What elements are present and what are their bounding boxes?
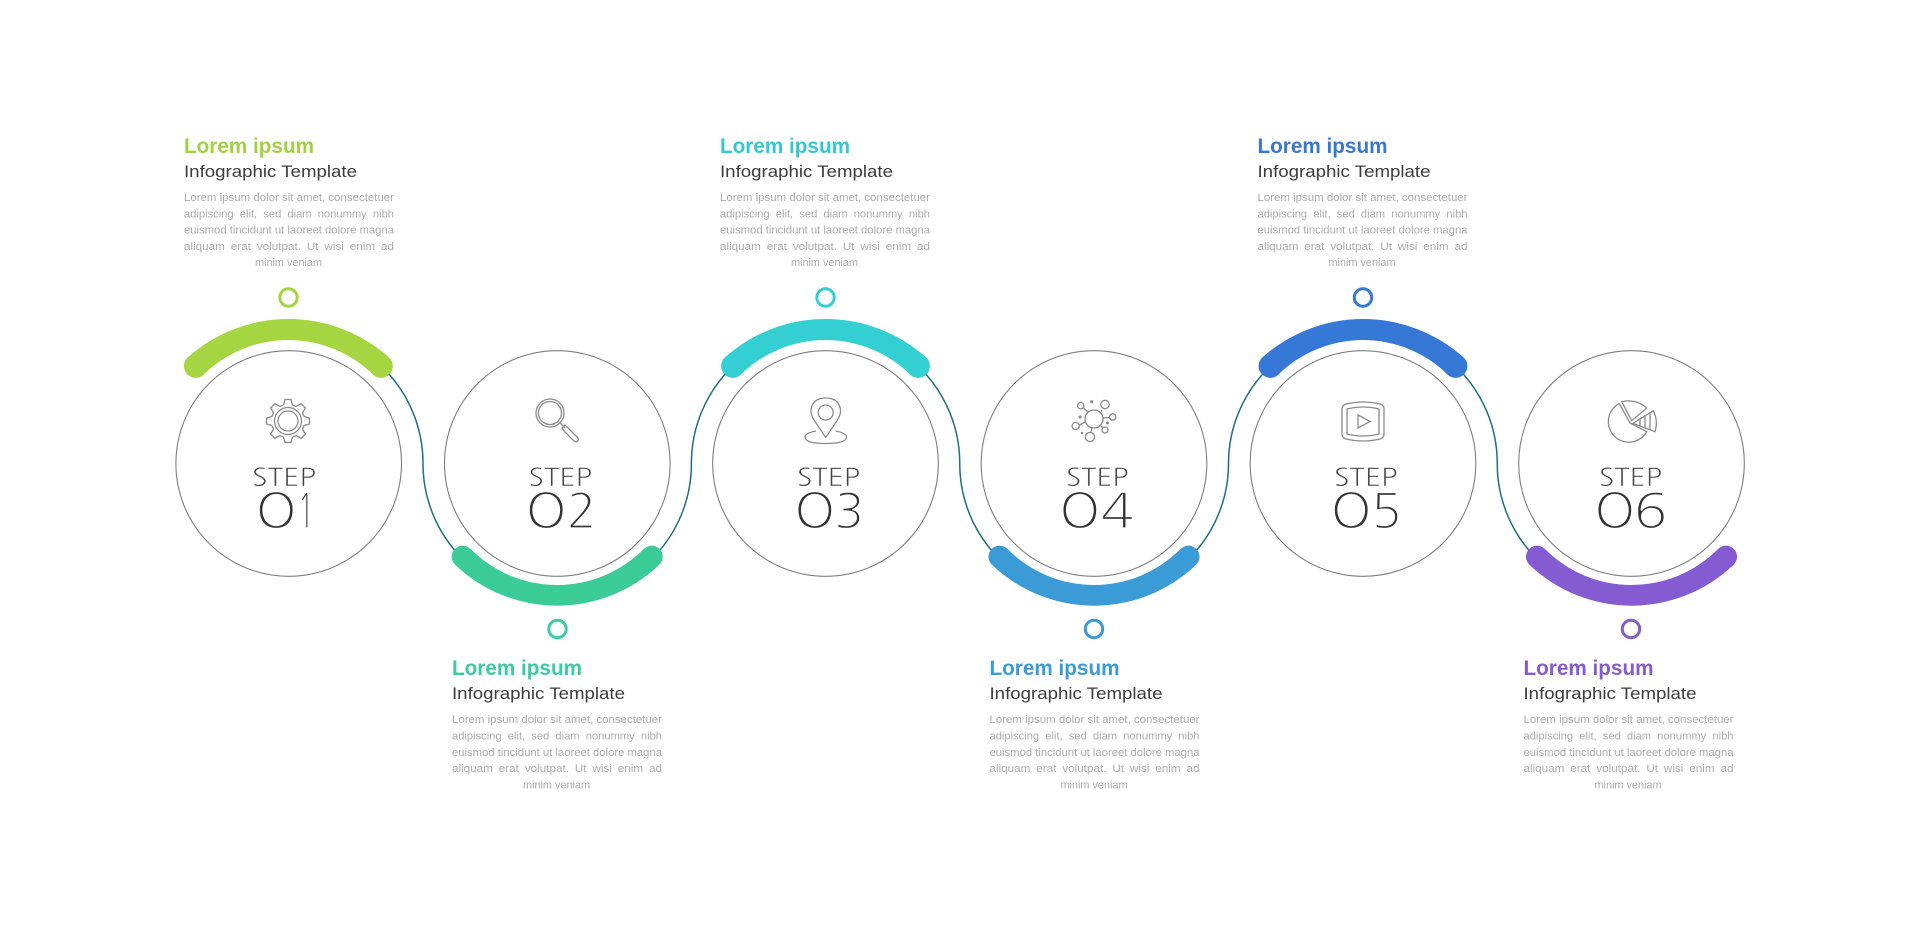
heading: step 5 title: Lorem ipsum — [1258, 134, 1388, 158]
label: step 3: STEP — [797, 465, 860, 490]
text block: step 6 description: adipiscing elit, sed diam nonummy nibh — [1524, 730, 1734, 742]
number: step 1: 1 — [298, 487, 314, 535]
connector: step 4 to 5 — [1189, 368, 1268, 558]
connector: step 2 to 3 — [652, 368, 730, 558]
subheading: step 3: Infographic Template — [720, 162, 893, 181]
text block: step 1 description: minim veniam — [255, 257, 322, 269]
text block: step 1 description: Lorem ipsum dolor sit amet, consectetuer — [184, 192, 394, 204]
text block: step 1 description: euismod tincidunt ut laoreet dolore magna — [184, 224, 395, 236]
icon: pie chart — [1608, 401, 1656, 442]
number: step 4: 4 — [1100, 487, 1134, 535]
label: step 5: STEP — [1334, 465, 1398, 490]
number: step 6: 6 — [1634, 487, 1668, 535]
panel: step 6 — [1519, 351, 1744, 792]
text block: step 6 description — [1524, 714, 1734, 792]
text block: step 3 description — [720, 192, 931, 269]
text block: step 4 description — [990, 714, 1200, 792]
text block: step 5 description: aliquam erat volutpat. Ut wisi enim ad — [1258, 241, 1468, 253]
ring marker: step 4 — [1085, 620, 1103, 638]
ring marker: step 5 — [1354, 289, 1372, 306]
arc: step 3 — [721, 319, 930, 378]
arc: step 4 — [988, 546, 1200, 606]
text block: step 5 description: euismod tincidunt ut laoreet dolore magna — [1258, 224, 1468, 236]
text block: step 3 description: adipiscing elit, sed diam nonummy nibh — [720, 208, 930, 220]
heading: step 2 title: Lorem ipsum — [452, 656, 582, 680]
number: step 3: 3 — [835, 487, 864, 535]
text block: step 3 description: Lorem ipsum dolor sit amet, consectetuer — [720, 192, 930, 204]
number: step 4 — [1059, 487, 1134, 535]
circle: step 3 — [713, 351, 938, 576]
circle: step 6 — [1519, 351, 1744, 576]
text block: step 2 description: aliquam erat volutpat. Ut wisi enim ad — [452, 763, 662, 775]
text block: step 1 description: adipiscing elit, sed diam nonummy nibh — [184, 208, 394, 220]
ring marker: step 6 — [1622, 620, 1640, 638]
heading: step 3 title: Lorem ipsum — [720, 134, 850, 158]
text block: step 1 description — [184, 192, 395, 269]
arc: step 5 — [1259, 319, 1467, 378]
subheading: step 4: Infographic Template — [990, 684, 1162, 703]
text block: step 6 description: aliquam erat volutpat. Ut wisi enim ad — [1524, 763, 1734, 775]
panel: step 5 — [1250, 134, 1476, 576]
panel: step 3 — [713, 134, 938, 576]
text block: step 4 description: adipiscing elit, sed diam nonummy nibh — [990, 730, 1200, 742]
label: step 2: STEP — [528, 465, 592, 490]
text block: step 4 description: minim veniam — [1060, 780, 1128, 792]
subheading: step 5: Infographic Template — [1258, 162, 1430, 181]
arc: step 2 — [452, 546, 663, 606]
text block: step 6 description: Lorem ipsum dolor sit amet, consectetuer — [1524, 714, 1734, 726]
number: step 5: 5 — [1371, 487, 1402, 535]
number: step 6 — [1594, 487, 1668, 535]
connector: step 5 to 6 — [1458, 368, 1536, 558]
text block: step 5 description: Lorem ipsum dolor sit amet, consectetuer — [1258, 192, 1468, 204]
label: step 6: STEP — [1599, 465, 1662, 490]
arc: step 1 — [184, 319, 393, 378]
text block: step 2 description: minim veniam — [523, 780, 590, 792]
text block: step 5 description: minim veniam — [1328, 257, 1396, 269]
heading: step 4 title: Lorem ipsum — [990, 656, 1120, 680]
subheading: step 2: Infographic Template — [452, 684, 625, 703]
icon: magnifier — [536, 399, 578, 442]
icon: network — [1072, 400, 1116, 442]
arc: step 6 — [1526, 546, 1737, 606]
label: step 1: STEP — [252, 465, 316, 490]
label: step 4: STEP — [1066, 465, 1128, 490]
number: step 4: O — [1059, 487, 1100, 535]
text block: step 2 description: Lorem ipsum dolor sit amet, consectetuer — [452, 714, 662, 726]
text block: step 1 description: aliquam erat volutpat. Ut wisi enim ad — [184, 241, 394, 253]
text block: step 2 description — [452, 714, 663, 792]
circle: step 1 — [176, 351, 402, 576]
ring marker: step 1 — [280, 289, 297, 306]
panel: step 1 — [176, 134, 402, 576]
text block: step 3 description: aliquam erat volutpat. Ut wisi enim ad — [720, 241, 930, 253]
panel: step 2 — [444, 351, 670, 792]
connector: step 1 to 2 — [384, 368, 462, 558]
text block: step 3 description: euismod tincidunt ut laoreet dolore magna — [720, 224, 931, 236]
number: step 1: O — [256, 487, 297, 535]
number: step 5: O — [1331, 487, 1372, 535]
subheading: step 6: Infographic Template — [1524, 684, 1696, 703]
panel: step 4 — [981, 351, 1207, 792]
circle: step 5 — [1250, 351, 1476, 576]
number: step 2 — [526, 487, 596, 535]
heading: step 6 title: Lorem ipsum — [1524, 656, 1654, 680]
icon: location pin — [805, 398, 846, 444]
text block: step 4 description: aliquam erat volutpat. Ut wisi enim ad — [990, 763, 1200, 775]
text block: step 5 description — [1258, 192, 1468, 269]
ring marker: step 2 — [549, 620, 566, 638]
number: step 2: 2 — [567, 487, 596, 535]
text block: step 5 description: adipiscing elit, sed diam nonummy nibh — [1258, 208, 1468, 220]
number: step 2: O — [526, 487, 567, 535]
circle: step 2 — [444, 351, 670, 576]
text block: step 2 description: euismod tincidunt ut laoreet dolore magna — [452, 747, 663, 759]
text block: step 4 description: Lorem ipsum dolor sit amet, consectetuer — [990, 714, 1200, 726]
text block: step 4 description: euismod tincidunt ut laoreet dolore magna — [990, 747, 1200, 759]
icon: gear — [266, 400, 310, 442]
connector: step 3 to 4 — [920, 368, 999, 558]
ring marker: step 3 — [817, 289, 834, 306]
number: step 5 — [1331, 487, 1402, 535]
text block: step 3 description: minim veniam — [791, 257, 858, 269]
circle: step 4 — [981, 351, 1207, 576]
number: step 6: O — [1594, 487, 1635, 535]
icon: video player — [1342, 402, 1384, 441]
text block: step 2 description: adipiscing elit, sed diam nonummy nibh — [452, 730, 662, 742]
number: step 3: O — [794, 487, 835, 535]
number: step 1 — [256, 487, 314, 535]
text block: step 6 description: minim veniam — [1594, 780, 1662, 792]
text block: step 6 description: euismod tincidunt ut laoreet dolore magna — [1524, 747, 1734, 759]
number: step 3 — [794, 487, 864, 535]
heading: step 1 title: Lorem ipsum — [184, 134, 314, 158]
subheading: step 1: Infographic Template — [184, 162, 357, 181]
